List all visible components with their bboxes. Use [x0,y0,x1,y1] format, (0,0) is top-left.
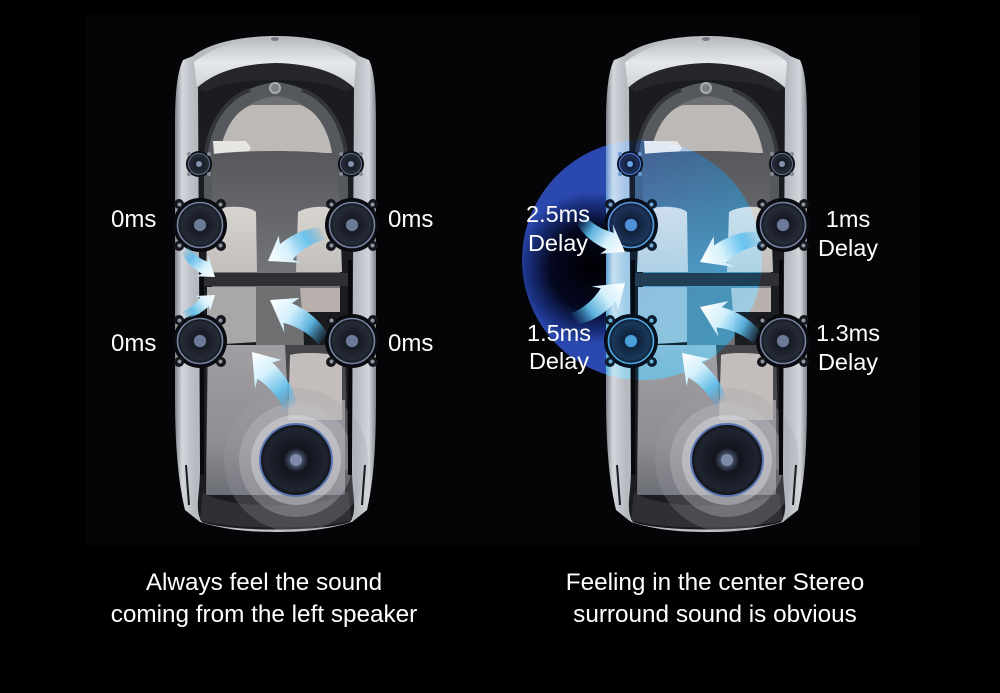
car with speakers, right [604,36,810,532]
delay labels, left car: 0ms [388,330,433,357]
sound arrows, right car [565,208,767,413]
right car: staggered delays [526,36,880,532]
infographic canvas [112,36,880,627]
delay labels, left car: 0ms [111,206,156,233]
sound arrows, left car [177,217,335,418]
delay labels, right car: Delay [529,348,589,374]
delay labels, right car: Delay [528,230,588,256]
delay labels, left car [111,206,433,357]
delay labels, right car [526,201,880,375]
delay labels, right car: Delay [818,235,878,261]
delay labels, left car: 0ms [388,206,433,233]
caption: right: surround sound is obvious [573,601,857,628]
left car: all speakers at equal delay [111,36,433,532]
blue surround halo behind right car [522,140,762,380]
delay labels, right car: 2.5ms [526,201,590,227]
caption: left: coming from the left speaker [111,601,417,628]
delay labels, right car: 1.3ms [816,320,880,346]
car with speakers, left [173,36,379,532]
caption: left [111,569,417,628]
dark backdrop panel [85,15,920,545]
delay labels, right car: 1.5ms [527,320,591,346]
caption: left: Always feel the sound [146,569,382,596]
caption: right [566,569,864,628]
delay labels, left car: 0ms [111,330,156,357]
delay labels, right car: Delay [818,349,878,375]
delay labels, right car: 1ms [826,206,870,232]
blue tint over car [606,140,766,380]
caption: right: Feeling in the center Stereo [566,569,864,596]
